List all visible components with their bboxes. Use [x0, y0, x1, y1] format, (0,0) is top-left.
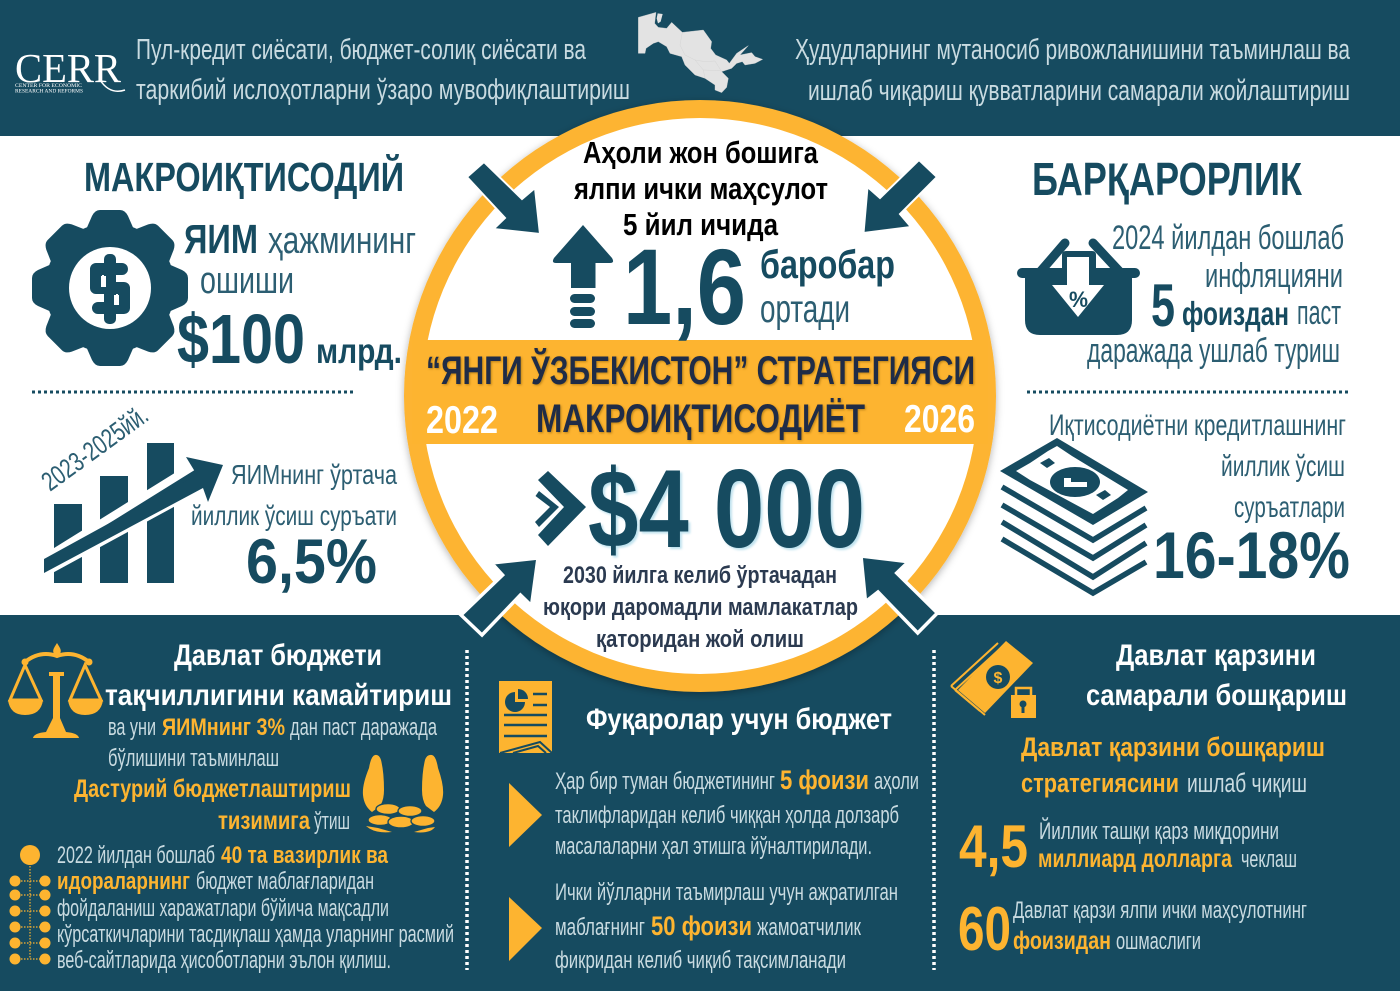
stat: 1,6 times: 1,6 [623, 226, 746, 347]
header: CERR logo: RESEARCH AND REFORMS [15, 88, 83, 94]
stat: credit growth: суръатлари [1234, 491, 1345, 524]
stat: average GDP growth: йиллик ўсиш суръати [191, 500, 397, 531]
header: left text [136, 34, 630, 106]
center top text: Аҳоли жон бошига [583, 135, 819, 170]
stat: average GDP growth: ЯИМнинг ўртача [231, 459, 397, 490]
header: CERR logo: CERR [15, 45, 122, 91]
icon: money and lock: $ [994, 670, 1003, 687]
stat: GDP growth $100 bn: $100 [177, 300, 305, 378]
text: 50 percent: фикридан келиб чиқиб тақсимланади [555, 947, 846, 974]
center band title: МАКРОИҚТИСОДИЁТ [536, 397, 865, 441]
stat: GDP growth $100 bn: ЯИМ [184, 216, 258, 262]
header: Uzbekistan map [638, 12, 763, 93]
text: 50 percent: Ички йўлларни таъмирлаш учун ажратилган [555, 879, 898, 906]
stat: GDP growth $100 bn [177, 216, 416, 378]
header: left text: таркибий ислоҳотларни ўзаро мувофиқлаштириш [136, 74, 630, 106]
stat: 60 percent: ошмаслиги [1116, 928, 1201, 955]
text: deficit target: бўлишини таъминлаш [108, 745, 279, 772]
text: 50 percent: жамоатчилик [757, 914, 861, 941]
icon: hands with coins [363, 755, 443, 832]
icon: organisation tree [10, 845, 50, 964]
text: 5 percent [555, 765, 919, 860]
text: 40 ministries: кўрсаткичларини тасдиқлаш ҳамда уларнинг расмий [57, 921, 454, 948]
icon: triangle bullet 1 [509, 783, 542, 847]
stat: inflation [1087, 219, 1344, 370]
stat: credit growth: 16-18% [1153, 518, 1350, 592]
stat: average GDP growth [191, 459, 397, 597]
rotated years label: 2023-2025йй. [36, 400, 154, 497]
text: 50 percent: маблағнинг [555, 914, 645, 941]
stat: GDP growth $100 bn: млрд. [316, 332, 402, 371]
icon: chevrons [535, 471, 586, 546]
heading: public debt: Давлат қарзини [1116, 639, 1316, 672]
text: 50 percent [555, 879, 898, 974]
text: 40 ministries [57, 842, 454, 974]
center band title: 2026 [904, 398, 975, 441]
icon: stack of money [1000, 438, 1148, 593]
stat: 4,5 billion [959, 813, 1297, 880]
text: 40 ministries: веб-сайтларида ҳисоботларни эълон қилиш. [57, 947, 391, 974]
arrow: top right [864, 160, 937, 233]
center bottom text: 2030 йилга келиб ўртачадан [563, 562, 837, 589]
icon: triangle bullet 2 [509, 897, 542, 961]
stat: GDP growth $100 bn: ҳажмининг [268, 220, 416, 262]
stat: 4,5 billion: миллиард долларга [1038, 845, 1233, 873]
text: deficit target [108, 714, 437, 772]
icon: basket with percent: % [1069, 287, 1088, 312]
text: 40 ministries: 40 та вазирлик ва [221, 842, 389, 869]
text: 50 percent: 50 фоизи [651, 911, 752, 941]
stat: average GDP growth: 6,5% [246, 527, 377, 597]
stat: inflation: 5 [1151, 272, 1175, 339]
text: 40 ministries: фойдаланиш харажатлари бўйича мақсадли [57, 895, 389, 922]
arrow: top left [467, 162, 540, 234]
text: program budgeting: Дастурий бюджетлаштириш [74, 775, 351, 803]
text: debt strategy: ишлаб чиқиш [1187, 768, 1307, 798]
text: program budgeting [74, 775, 351, 835]
heading: budget deficit [105, 639, 452, 712]
icon: basket with percent [1017, 243, 1140, 335]
header: left text: Пул-кредит сиёсати, бюджет-солиқ сиёсати ва [136, 34, 587, 66]
text: deficit target: ЯИМнинг 3% [162, 714, 285, 741]
center bottom text: юқори даромадли мамлакатлар [543, 594, 858, 621]
text: 5 percent: Ҳар бир туман бюджетининг [555, 768, 775, 795]
stat: 4,5 billion: Йиллик ташқи қарз миқдорини [1039, 817, 1279, 845]
heading: stability: БАРҚАРОРЛИК [1032, 153, 1303, 205]
text: deficit target: дан паст даражада [290, 714, 437, 741]
center bottom text [543, 562, 858, 653]
stat: GDP growth $100 bn: ошиши [200, 260, 294, 302]
header: right text [795, 34, 1351, 107]
header: CERR logo: CENTER FOR ECONOMIC [15, 83, 82, 89]
stat: inflation: фоиздан [1182, 295, 1289, 332]
stat: 60 percent [958, 895, 1307, 964]
heading: budget deficit: тақчиллигини камайтириш [105, 679, 452, 712]
center band title: “ЯНГИ ЎЗБЕКИСТОН” СТРАТЕГИЯСИ [426, 346, 975, 393]
stat: 60 percent: фоизидан [1013, 927, 1111, 955]
stat: 1,6 times: баробар [760, 243, 895, 287]
heading: public debt [1086, 639, 1347, 712]
arrow: bottom left [461, 558, 538, 635]
icon: budget document [499, 681, 552, 753]
stat: 1,6 times: ортади [760, 288, 850, 331]
arrow: bottom right [861, 556, 937, 633]
stat: 1,6 times [623, 226, 895, 347]
text: debt strategy: Давлат қарзини бошқариш [1021, 732, 1325, 762]
text: 5 percent: 5 фоизи [780, 765, 869, 795]
center top text [573, 135, 828, 242]
stat: inflation: инфляцияни [1205, 257, 1343, 295]
stat: $4 000: $4 000 [588, 447, 865, 571]
text: program budgeting: тизимига [218, 807, 311, 835]
icon: up arrow [553, 225, 613, 328]
text: program budgeting: ўтиш [314, 808, 350, 835]
center top text: ялпи ички маҳсулот [573, 171, 828, 206]
center bottom text: қаторидан жой олиш [596, 626, 804, 653]
text: deficit target: ва уни [108, 714, 156, 741]
stat: credit growth: йиллик ўсиш [1221, 450, 1345, 483]
text: debt strategy: стратегиясини [1021, 768, 1179, 798]
text: 5 percent: таклифларидан келиб чиққан ҳолда долзарб [555, 802, 899, 829]
center band title [426, 346, 975, 442]
text: 5 percent: масалаларни ҳал этишга йўналтирилади. [555, 833, 872, 860]
icon: scales [8, 643, 103, 738]
text: 5 percent: аҳоли [874, 768, 919, 795]
text: 40 ministries: идораларнинг [57, 868, 190, 895]
heading: public debt: самарали бошқариш [1086, 679, 1347, 712]
stat: inflation: паст [1297, 294, 1341, 332]
icon: gear with dollar [32, 210, 188, 366]
stat: 4,5 billion: 4,5 [959, 813, 1028, 880]
text: 40 ministries: бюджет маблағларидан [196, 868, 374, 895]
center band title: 2022 [426, 399, 498, 442]
center top text: 5 йил ичида [623, 207, 779, 242]
central circle [404, 100, 996, 692]
text: 40 ministries: 2022 йилдан бошлаб [57, 842, 215, 869]
icon: money and lock [951, 641, 1036, 718]
stat: 4,5 billion: чеклаш [1241, 846, 1297, 873]
heading: citizens budget: Фуқаролар учун бюджет [586, 703, 892, 736]
chart icon: rising bars with arrow [44, 443, 223, 583]
heading: macroeconomic: МАКРОИҚТИСОДИЙ [84, 154, 404, 200]
heading: budget deficit: Давлат бюджети [174, 639, 382, 672]
text: debt strategy [1021, 732, 1325, 798]
stat: credit growth [1049, 409, 1350, 592]
stat: 60 percent: 60 [958, 895, 1011, 964]
